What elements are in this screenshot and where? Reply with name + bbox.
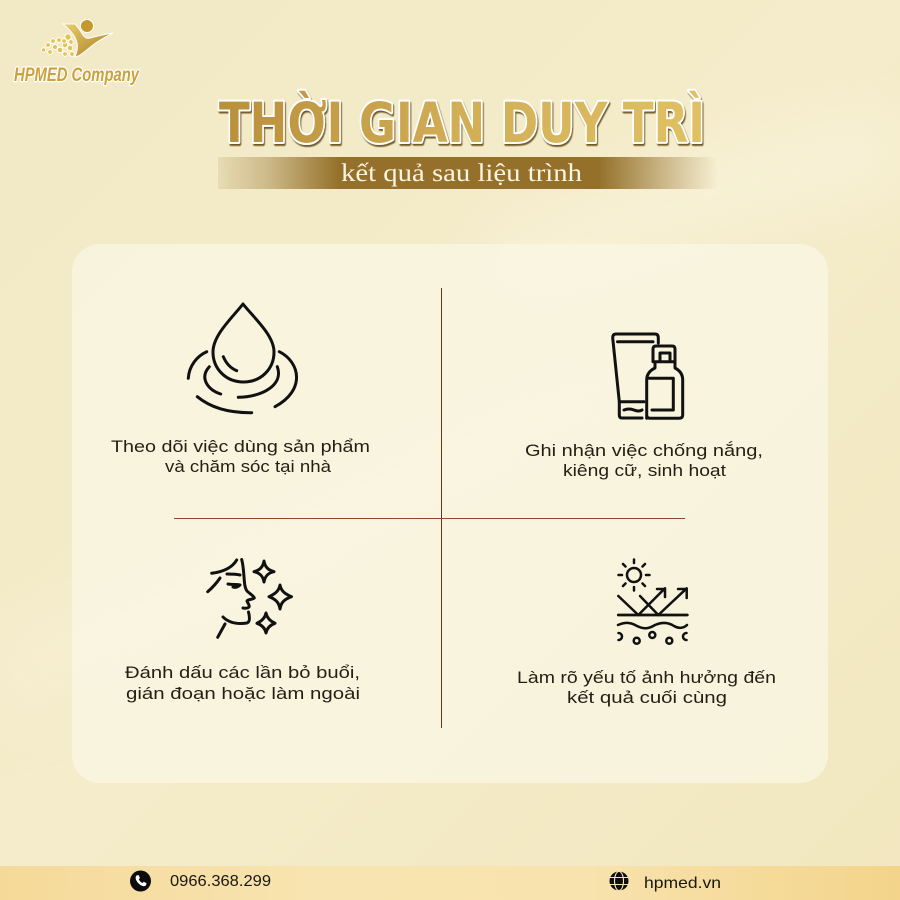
subtitle band — [218, 157, 718, 189]
icon: face with sparkles — [208, 560, 292, 637]
subtitle: kết quả sau liệu trình — [341, 160, 583, 187]
title: THỜI GIAN DUY TRÌ — [219, 90, 705, 155]
text: top left — [111, 437, 370, 476]
phone number: 0966.368.299 — [170, 873, 271, 890]
footer bar — [0, 866, 900, 900]
text: bottom right — [517, 668, 776, 707]
text: bottom left: Đánh dấu các lần bỏ buổi, — [125, 663, 360, 682]
text: top left: Theo dõi việc dùng sản phẩm — [111, 437, 370, 456]
text: top right — [525, 441, 763, 480]
text: top right: Ghi nhận việc chống nắng, — [525, 441, 763, 460]
icon: phone — [130, 870, 151, 892]
logo wordmark: HPMED Company — [14, 65, 140, 86]
panel: main card — [72, 244, 828, 783]
website: hpmed.vn — [644, 875, 721, 892]
text: top left: và chăm sóc tại nhà — [165, 457, 332, 476]
text: bottom right: kết quả cuối cùng — [567, 688, 727, 707]
text: bottom left: gián đoạn hoặc làm ngoài — [126, 684, 360, 703]
text: top right: kiêng cữ, sinh hoạt — [563, 461, 726, 480]
icon: globe — [610, 872, 628, 890]
icon: sun and skin — [618, 560, 687, 644]
icon: tube and bottle — [613, 334, 683, 418]
text: bottom right: Làm rõ yếu tố ảnh hưởng đến — [517, 668, 776, 687]
logo mark — [41, 20, 113, 57]
text: bottom left — [125, 663, 360, 703]
icon: water drop — [188, 304, 297, 413]
logo: HPMED Company — [14, 20, 140, 86]
